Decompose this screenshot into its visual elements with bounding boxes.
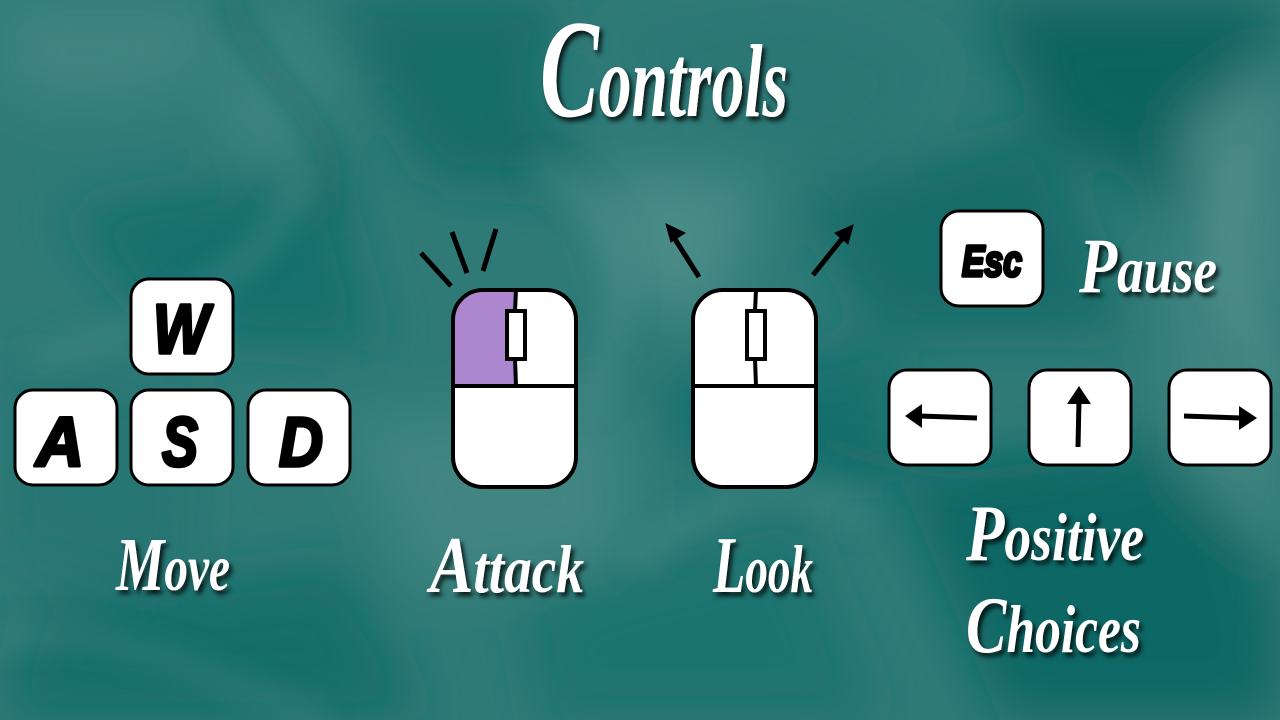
- key up arrow: [1029, 370, 1131, 465]
- key A: A: [34, 403, 84, 481]
- label: Move: Move: [115, 523, 230, 607]
- key W: W: [153, 290, 214, 368]
- key W: [131, 279, 233, 374]
- key D: D: [279, 403, 323, 481]
- key S: S: [162, 403, 198, 481]
- key Esc: Esc: [962, 237, 1022, 286]
- panel: move keys: [15, 279, 350, 485]
- key left arrow: [889, 370, 991, 465]
- icon: mouse attack: [421, 229, 576, 487]
- key A: [15, 390, 117, 485]
- key D: [248, 390, 350, 485]
- label: Positive Choices: [965, 490, 1144, 670]
- look arrows: [666, 224, 853, 277]
- label: Look: Look: [712, 522, 813, 610]
- label: Pause: Pause: [1078, 222, 1217, 309]
- icon: mouse look: [666, 224, 853, 487]
- click lines: [421, 229, 496, 286]
- label: Positive Choices: Choices: [966, 582, 1141, 670]
- label: Positive Choices: Positive: [965, 490, 1144, 578]
- key right arrow: [1169, 370, 1271, 465]
- label: Attack: Attack: [426, 522, 584, 610]
- key S: [131, 390, 233, 485]
- key Esc: [941, 211, 1043, 306]
